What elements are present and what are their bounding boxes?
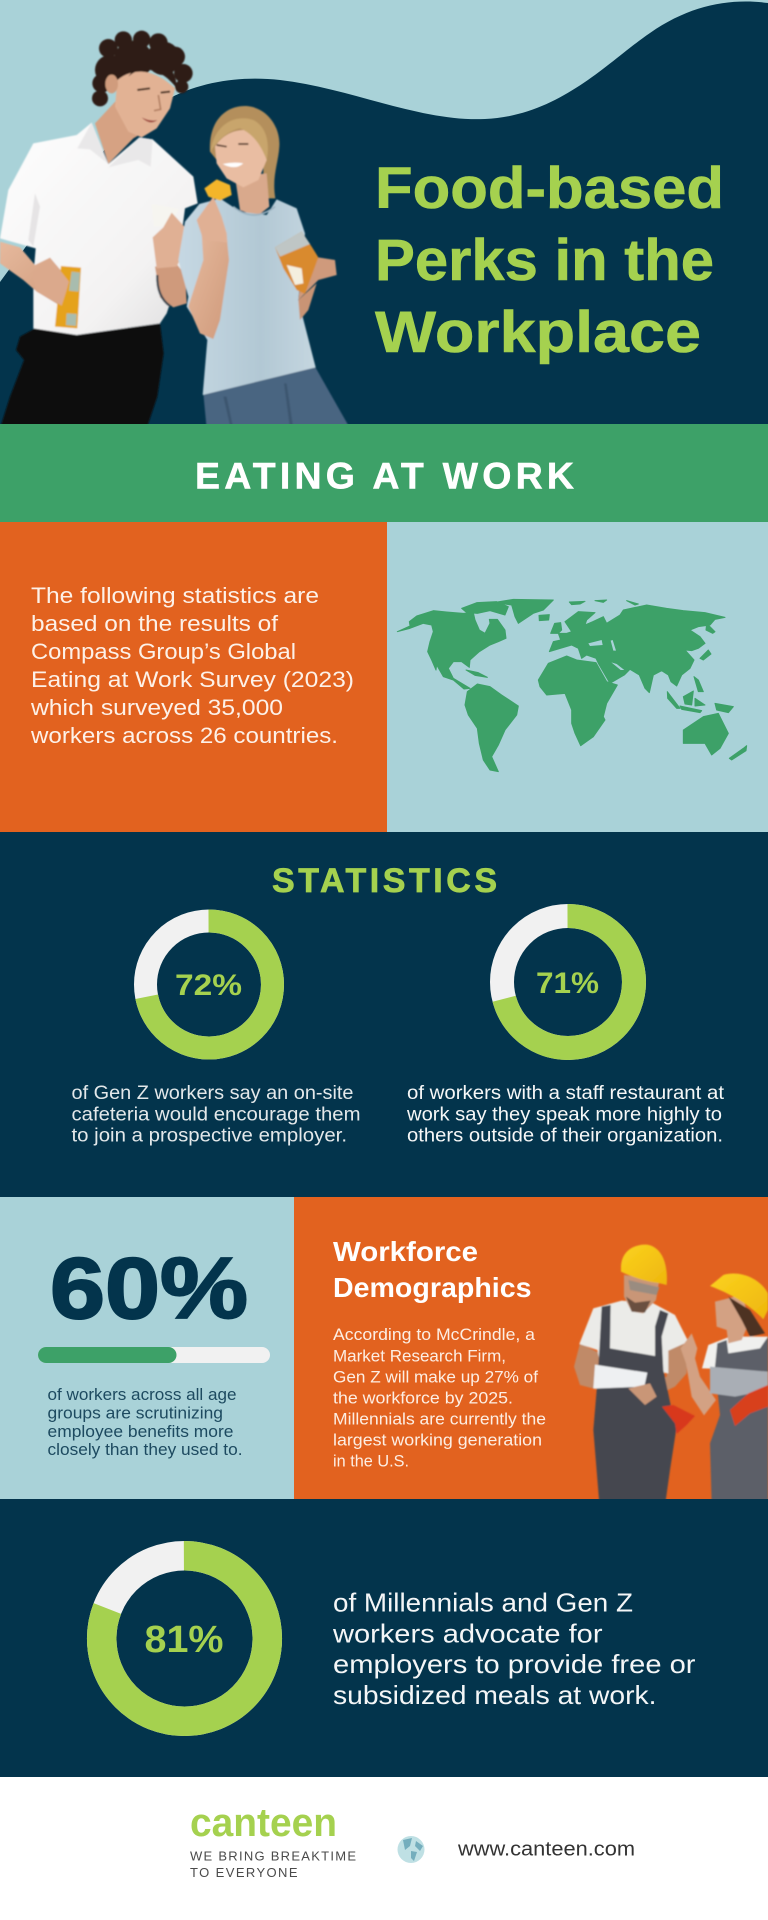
woman t-shirt neckline [233, 207, 275, 215]
text: benefits stat: closely than they used to. [48, 1441, 243, 1459]
text: free meals stat: employers to provide free or [333, 1649, 696, 1679]
north america [397, 611, 506, 689]
panel: hero [0, 0, 768, 428]
text: gen z stat [72, 1083, 360, 1146]
60 percent background [0, 1197, 294, 1499]
statistics background [0, 832, 768, 1197]
map background [387, 522, 768, 832]
intro text [30, 583, 354, 748]
text: gen z stat: of Gen Z workers say an on-site [72, 1083, 354, 1104]
new zealand [729, 746, 747, 760]
female worker overalls [710, 1337, 768, 1503]
big number: 60% [50, 1241, 248, 1337]
donut chart: 81% [102, 1556, 267, 1721]
donut chart: 71%: 71% [536, 967, 599, 1000]
tagline: TO EVERYONE [190, 1865, 298, 1880]
heading: workforce demographics [333, 1236, 532, 1303]
woman t-shirt [178, 198, 316, 395]
icon: world map [397, 599, 747, 772]
female worker hair [728, 1297, 765, 1337]
man forelock [128, 68, 178, 86]
heading: workforce demographics: Demographics [333, 1272, 532, 1303]
man face details [142, 117, 157, 122]
banner: eating at work [0, 424, 768, 522]
text: staff restaurant stat: work say they speak more highly to [406, 1104, 722, 1126]
male worker overalls [593, 1305, 677, 1503]
demographics text: in the U.S. [333, 1452, 409, 1470]
intro text: Eating at Work Survey (2023) [31, 667, 354, 692]
man ear [105, 75, 118, 93]
male worker glove [662, 1405, 695, 1434]
text: gen z stat: to join a prospective employer. [72, 1126, 347, 1146]
hero wave shape [0, 2, 768, 424]
woman hand [197, 197, 227, 243]
panel: workforce demographics [294, 1197, 768, 1503]
donut chart: 72% [146, 921, 272, 1048]
hero background [0, 0, 768, 282]
intro text: The following statistics are [31, 583, 319, 608]
man hand [153, 213, 186, 268]
intro text: workers across 26 countries. [30, 723, 338, 748]
demographics background [294, 1197, 768, 1499]
demographics text: Gen Z will make up 27% of [333, 1368, 538, 1386]
woman jeans [203, 367, 350, 428]
panel: 60 percent stat [0, 1197, 294, 1499]
south america [465, 684, 518, 772]
title: Workplace [375, 300, 701, 365]
panel: 81 percent stat [0, 1499, 768, 1777]
man trousers [0, 323, 164, 428]
uk [551, 623, 562, 633]
woman fringe [211, 118, 268, 160]
male worker arms [574, 1343, 688, 1390]
tagline [190, 1848, 356, 1880]
text: benefits stat: of workers across all age [48, 1386, 236, 1404]
panel: survey intro [0, 522, 387, 832]
arctic russia islands [569, 600, 638, 605]
text: free meals stat: workers advocate for [332, 1618, 603, 1648]
photo: man and woman eating snacks [0, 31, 350, 428]
male worker hand [628, 1383, 657, 1405]
clipboard [593, 1365, 647, 1389]
female worker tee [702, 1337, 768, 1370]
panel: statistics [0, 832, 768, 1197]
demographics text: the workforce by 2025. [333, 1388, 513, 1408]
japan and asian islands [667, 623, 733, 713]
panel: footer [0, 1777, 768, 1920]
progress bar [38, 1347, 270, 1363]
man hair [92, 31, 193, 106]
man neck [95, 100, 142, 164]
australia [683, 713, 728, 755]
heading: workforce demographics: Workforce [333, 1236, 478, 1267]
text: staff restaurant stat: of workers with a staff restaurant at [407, 1083, 725, 1104]
heading: statistics: STATISTICS [272, 862, 497, 900]
text: free meals stat: of Millennials and Gen Z [333, 1588, 633, 1618]
donut chart: 81%: 81% [144, 1619, 224, 1661]
donut chart: 72%: 72% [175, 969, 242, 1002]
text: benefits stat: employee benefits more [48, 1423, 234, 1441]
man arm right with cup [155, 265, 187, 307]
demographics text: According to McCrindle, a [333, 1325, 536, 1344]
text: gen z stat: cafeteria would encourage them [72, 1104, 360, 1126]
woman arm with chip [188, 233, 229, 339]
man hand over can [46, 270, 70, 306]
caribbean [466, 670, 487, 677]
81 percent background [0, 1499, 768, 1777]
title: Food-based [375, 156, 724, 221]
logo: canteen: canteen [190, 1801, 337, 1845]
intro text: Compass Group’s Global [31, 639, 296, 664]
demographics text: Market Research Firm, [333, 1346, 506, 1366]
female worker glove [730, 1385, 768, 1426]
icon: globe [398, 1836, 424, 1863]
male worker goggles [628, 1280, 659, 1295]
text: benefits stat [48, 1386, 243, 1459]
male worker t-shirt [579, 1301, 688, 1373]
demographics text [333, 1325, 546, 1470]
woman arm with bag [298, 257, 337, 300]
woman hair [210, 106, 279, 198]
female worker face [715, 1295, 750, 1343]
female worker raised arm [681, 1333, 716, 1415]
demographics text: Millennials are currently the [333, 1410, 546, 1428]
woman neck [235, 173, 269, 217]
man face [115, 72, 175, 137]
text: free meals stat [332, 1588, 696, 1710]
title [375, 156, 724, 365]
greenland [493, 599, 553, 623]
text: staff restaurant stat: others outside of their organization. [407, 1126, 723, 1146]
text: free meals stat: subsidized meals at work. [333, 1680, 656, 1710]
yogurt cup [152, 204, 179, 227]
man collar and buttons [77, 123, 153, 167]
tablet [710, 1367, 768, 1397]
male worker helmet [621, 1245, 667, 1285]
drink can [55, 266, 81, 328]
text: staff restaurant stat [406, 1083, 725, 1146]
man shirt [0, 123, 198, 335]
tagline: WE BRING BREAKTIME [190, 1848, 356, 1864]
africa [538, 656, 617, 746]
chip [204, 179, 232, 201]
demographics text: largest working generation [333, 1430, 542, 1450]
photo: two construction workers [574, 1245, 768, 1503]
female worker helmet [710, 1274, 768, 1319]
eurasia [549, 605, 725, 693]
man arm left [0, 241, 62, 304]
intro background [0, 522, 387, 832]
man shirt shading [28, 193, 40, 247]
donut chart: 71% [502, 916, 634, 1048]
panel: world map [387, 522, 768, 832]
banner heading: EATING AT WORK [195, 454, 574, 496]
footer background [0, 1777, 768, 1920]
snack bag [275, 232, 318, 294]
woman smile [223, 163, 243, 167]
seas [588, 640, 624, 670]
title: Perks in the [375, 228, 714, 293]
banner background [0, 424, 768, 522]
website: www.canteen.com [457, 1838, 635, 1860]
text: benefits stat: groups are scrutinizing [48, 1404, 223, 1422]
intro text: based on the results of [31, 611, 279, 636]
iceland [539, 615, 549, 621]
male worker neck and face [624, 1275, 659, 1313]
male worker beard [626, 1297, 651, 1313]
woman face [215, 130, 267, 187]
arctic islands [462, 602, 508, 615]
intro text: which surveyed 35,000 [30, 695, 283, 720]
